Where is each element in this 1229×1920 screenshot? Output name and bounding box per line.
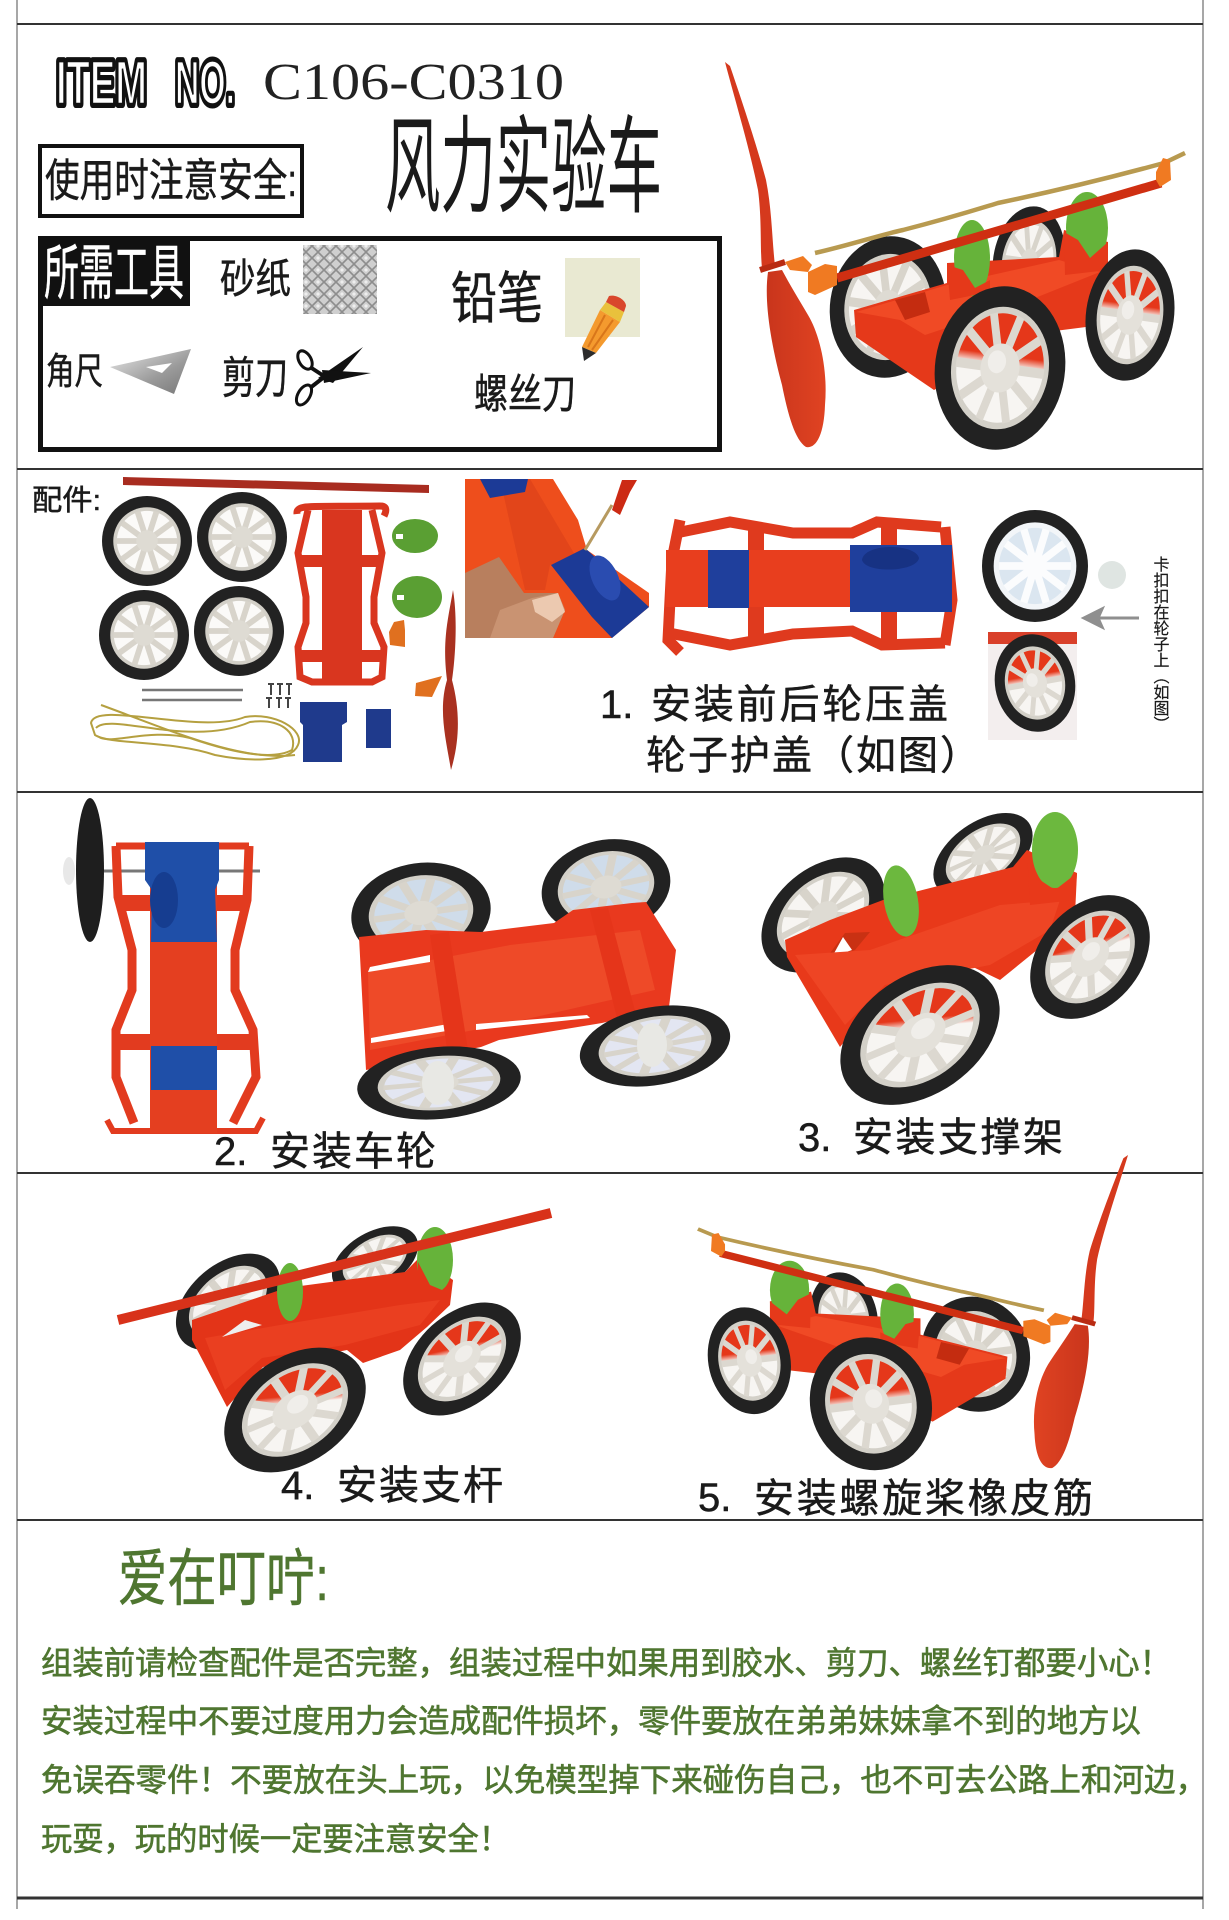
product title: 风力实验车 [385, 109, 662, 227]
step 2 caption: 2. [214, 1130, 247, 1174]
parts: orange clips [389, 620, 442, 697]
item number label: ITEM [56, 49, 147, 118]
set square label: 角尺 [46, 351, 103, 392]
step 3 caption: 安装支撑架 [853, 1116, 1063, 1160]
panel: step 4 [118, 1212, 551, 1508]
icon: pencil [565, 258, 640, 361]
reminder heading: 爱在叮咛: [118, 1545, 329, 1614]
icon: scissors [293, 347, 371, 408]
parts: rubber band [91, 705, 299, 759]
item number label: NO. [175, 49, 235, 118]
step 1 wheel hub cap [1098, 561, 1126, 589]
reminder text: 玩耍，玩的时候一定要注意安全！ [41, 1821, 510, 1857]
arrow [1084, 609, 1139, 627]
screwdriver label: 螺丝刀 [474, 371, 576, 417]
panel: parts [32, 477, 458, 770]
tools heading [38, 236, 190, 307]
item number label: ITEM [56, 49, 147, 118]
step 1 chassis with blue covers [664, 520, 952, 652]
panel: header [38, 49, 1185, 458]
parts: axles [142, 690, 243, 700]
step 2 chassis, top view [63, 798, 263, 1133]
step 1 photo: screwdriver and hand [465, 479, 649, 638]
step 3 caption: 3. [798, 1116, 831, 1160]
safety notice box [40, 146, 302, 216]
reminder text: 安装过程中不要过度用力会造成配件损坏，零件要放在弟弟妹妹拿不到的地方以 [41, 1703, 1141, 1739]
step 1 white wheel [982, 510, 1088, 622]
panel: reminder [41, 1545, 1207, 1857]
step 3 car with supports [739, 796, 1174, 1134]
parts: propeller [443, 590, 458, 770]
item number value: C106-C0310 [263, 54, 564, 111]
item number label: NO. [175, 49, 235, 118]
panel: required tools [38, 236, 720, 450]
reminder text: 免误吞零件！不要放在头上玩，以免模型掉下来碰伤自己，也不可去公路上和河边， [41, 1762, 1207, 1798]
parts: chassis frame [297, 506, 386, 682]
sandpaper label: 砂纸 [220, 256, 291, 302]
finished car photo [725, 62, 1185, 458]
safety notice box: 使用时注意安全: [45, 155, 297, 206]
parts label: 配件: [32, 484, 101, 517]
icon: set square [110, 349, 191, 394]
parts: four wheels [99, 492, 287, 680]
step 1 caption: 安装前后轮压盖 [651, 683, 948, 727]
vertical note: 卡扣扣在轮子上（如图） [1150, 556, 1170, 732]
step 4 car with rod [118, 1212, 551, 1498]
step 2 car with wheels, underside [345, 828, 737, 1126]
parts: blue covers [300, 702, 391, 762]
step 1 caption [600, 683, 980, 778]
step 4 caption: 4. [281, 1464, 314, 1508]
pencil label: 铅笔 [451, 267, 543, 330]
scissors label: 剪刀 [222, 354, 288, 403]
reminder text [41, 1645, 1207, 1857]
step 1 caption: 1. [600, 683, 633, 727]
step 1 wheel inset photo [987, 628, 1083, 740]
step 5 caption: 安装螺旋桨橡皮筋 [754, 1477, 1093, 1521]
panel: step 5 [698, 1155, 1128, 1521]
panel: step 2 [63, 798, 737, 1174]
step 5 car with propeller [698, 1155, 1128, 1477]
parts: green supports [392, 519, 442, 618]
tools heading: 所需工具 [44, 240, 184, 307]
icon: sandpaper [303, 245, 377, 314]
step 4 caption: 安装支杆 [337, 1464, 503, 1508]
step 5 caption: 5. [698, 1476, 731, 1520]
parts: screws [266, 684, 292, 708]
step 2 caption: 安装车轮 [270, 1130, 436, 1174]
parts: long rod [123, 477, 429, 493]
reminder text: 组装前请检查配件是否完整，组装过程中如果用到胶水、剪刀、螺丝钉都要小心！ [41, 1645, 1171, 1681]
step 1 caption: 轮子护盖（如图） [646, 734, 980, 778]
panel: step 1 [465, 479, 1170, 778]
panel: step 3 [739, 796, 1174, 1160]
